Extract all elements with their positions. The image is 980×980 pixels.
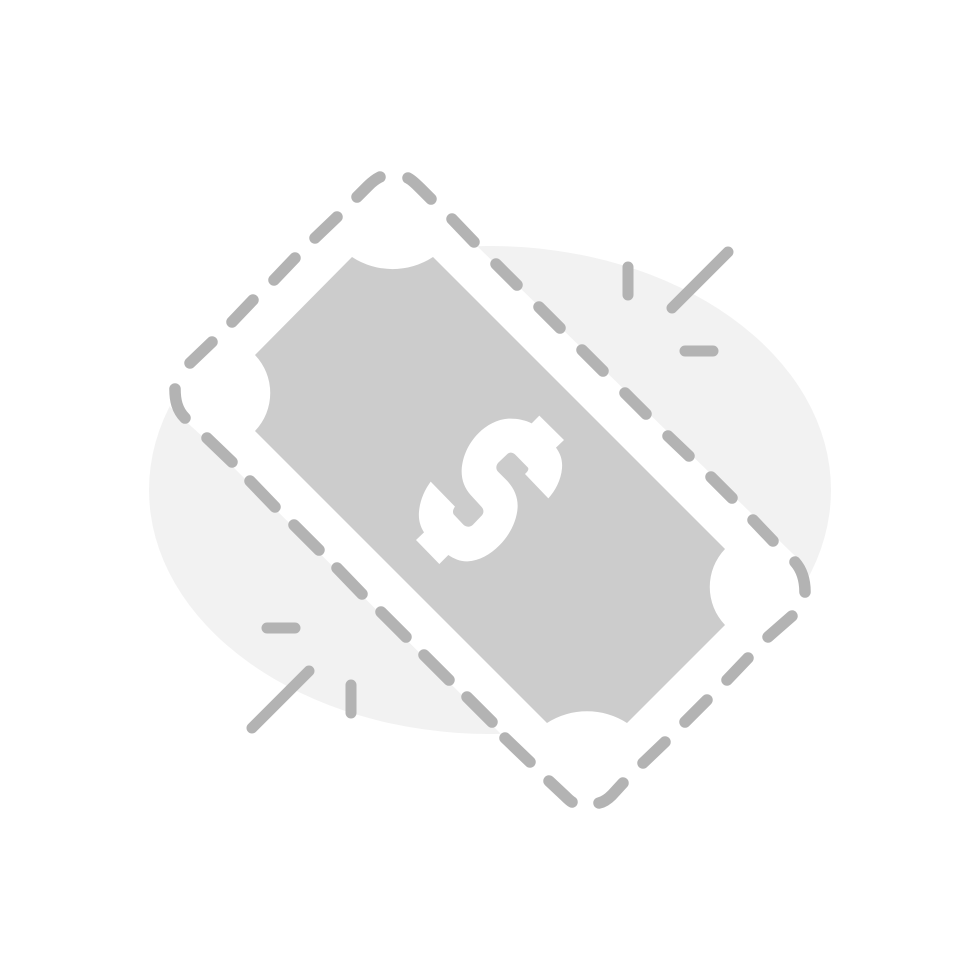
edge dashes: top-right	[452, 219, 773, 541]
dollar sign	[416, 416, 564, 564]
dashed border	[175, 177, 805, 803]
sparkle lines: bottom left	[252, 628, 351, 728]
corner dash: right	[795, 562, 805, 592]
sparkle lines: top right	[628, 252, 728, 351]
edge dashes: bottom-left	[207, 438, 530, 762]
corner dash: top	[357, 177, 380, 197]
corner dash: left	[175, 389, 185, 418]
background ellipse	[149, 246, 831, 734]
corner dash: bottom	[549, 781, 572, 802]
edge dashes: bottom-right	[643, 616, 792, 763]
edge dashes: top-left	[190, 217, 337, 363]
bill face	[255, 257, 725, 723]
white bill backing	[170, 173, 811, 803]
